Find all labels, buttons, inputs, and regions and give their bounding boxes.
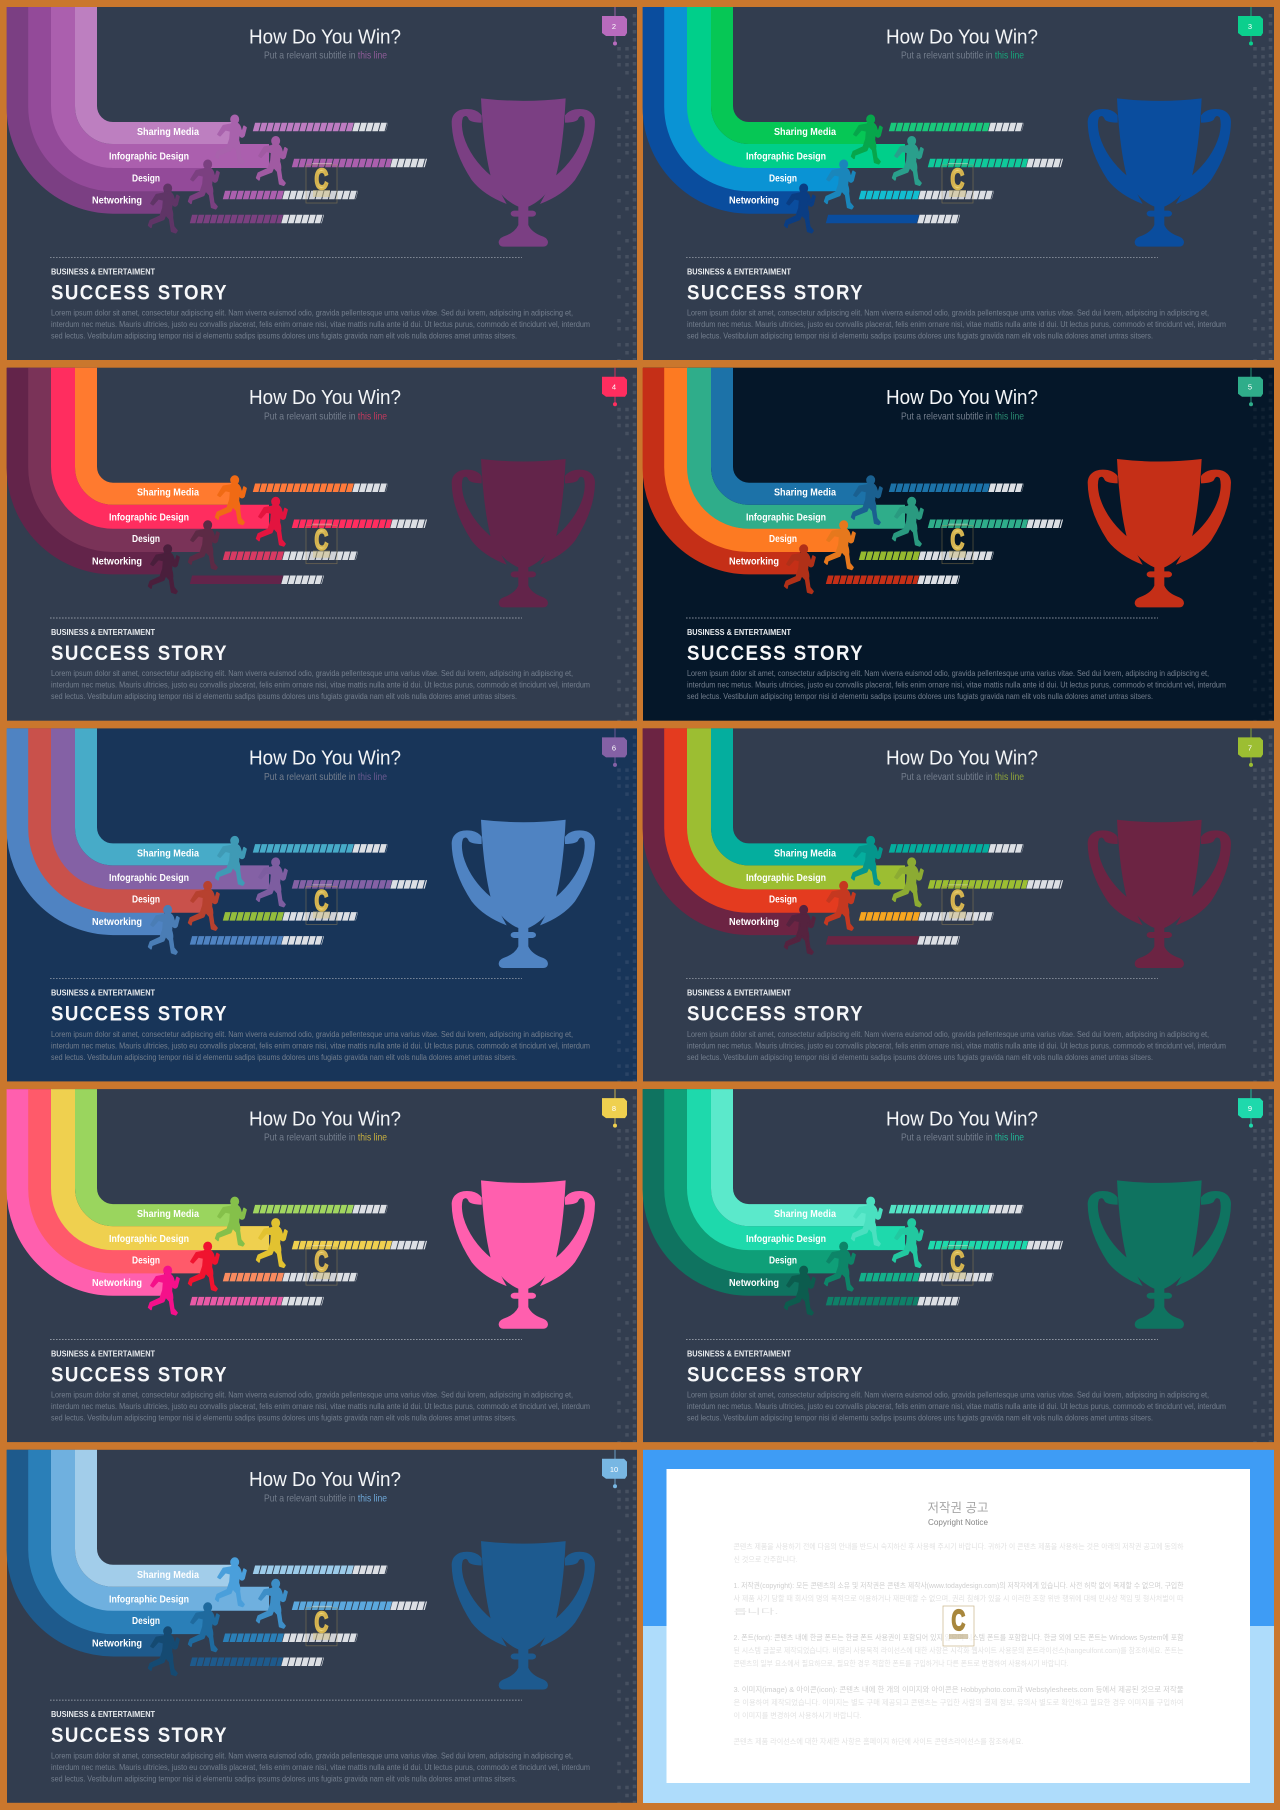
notice body text: 이 이미지를 변경하여 사용하시기 바랍니다. xyxy=(734,1710,862,1720)
notice subtitle: Copyright Notice xyxy=(928,1517,988,1527)
body text xyxy=(51,1751,590,1783)
progress bars xyxy=(827,127,1062,219)
body text: Lorem ipsum dolor sit amet, consectetur adipiscing elit. Nam viverra euismod odio, gravida pellentesque urna varius vitae. Sed dui lorem, adipiscing in adipiscing et, xyxy=(51,1030,573,1039)
band labels: Sharing Media xyxy=(774,1209,836,1220)
body text: sed lectus. Vestibulum adipiscing tempor nisi id elementu sadips ipsums dolores uns fugiats gravida nam elit vols nulla dolores amet untras sitsers. xyxy=(51,332,517,340)
band labels: Networking xyxy=(92,556,142,567)
panel: purple slide 2 xyxy=(7,7,637,360)
band labels: Sharing Media xyxy=(774,488,836,499)
notice body text xyxy=(734,1541,1184,1746)
kicker: BUSINESS & ENTERTAIMENT xyxy=(687,628,791,637)
heading: SUCCESS STORY xyxy=(687,642,864,665)
band labels: Networking xyxy=(92,917,142,928)
runner silhouettes xyxy=(149,115,287,233)
subtitle: Put a relevant subtitle in this line xyxy=(901,1132,1024,1144)
title: How Do You Win? xyxy=(249,748,401,770)
trophy xyxy=(1088,98,1231,247)
band labels: Networking xyxy=(92,1278,142,1289)
progress bars xyxy=(827,488,1062,580)
page number tab xyxy=(602,1089,627,1128)
body text: sed lectus. Vestibulum adipiscing tempor nisi id elementu sadips ipsums dolores uns fugiats gravida nam elit vols nulla dolores amet untras sitsers. xyxy=(51,692,517,701)
kicker: BUSINESS & ENTERTAIMENT xyxy=(687,1349,791,1358)
page number tab xyxy=(602,7,627,46)
body text: Lorem ipsum dolor sit amet, consectetur adipiscing elit. Nam viverra euismod odio, gravida pellentesque urna varius vitae. Sed dui lorem, adipiscing in adipiscing et, xyxy=(51,1391,573,1400)
white notice card xyxy=(666,1469,1250,1783)
curved bands xyxy=(18,1089,269,1284)
notice body text: 1. 저작권(copyright): 모든 콘텐츠의 소유 및 저작권은 콘텐츠 제작사(www.todaydesign.com)의 저작자에게 있습니다. 사전 허락 없이 복제할 수 없으며, 구입한 xyxy=(734,1580,1184,1590)
progress bars xyxy=(191,488,426,580)
trophy xyxy=(452,1541,595,1689)
body text: interdum nec metus. Mauris ultricies, justo eu convallis placerat, felis enim ornare nisi, vitae mattis nulla ante id dui. Ut lectus purus, commodo et tincidunt vel, interdum xyxy=(51,320,590,329)
runner silhouettes xyxy=(785,837,923,954)
page number tab: 6 xyxy=(612,743,616,752)
progress bars xyxy=(191,1570,426,1662)
band labels: Networking xyxy=(92,196,142,207)
page number tab: 3 xyxy=(1248,22,1252,31)
band labels: Design xyxy=(132,895,160,906)
kicker: BUSINESS & ENTERTAIMENT xyxy=(687,267,791,276)
body text xyxy=(687,669,1226,701)
trophy xyxy=(452,1180,595,1329)
band labels: Networking xyxy=(729,917,779,928)
runner silhouettes xyxy=(785,115,923,233)
band labels: Sharing Media xyxy=(774,127,836,138)
band labels: Design xyxy=(132,534,160,545)
body text xyxy=(687,308,1226,340)
side dot pattern xyxy=(619,1457,634,1803)
heading: SUCCESS STORY xyxy=(687,281,864,304)
trophy xyxy=(1088,459,1231,607)
runner silhouettes xyxy=(149,837,287,954)
side dot pattern xyxy=(619,14,634,360)
heading: SUCCESS STORY xyxy=(687,1363,864,1386)
notice body text: 릅니다. xyxy=(734,1607,778,1616)
heading: SUCCESS STORY xyxy=(51,1724,228,1747)
curved bands xyxy=(654,368,905,563)
panel: blue slide 10 xyxy=(7,1450,637,1803)
heading: SUCCESS STORY xyxy=(51,642,228,665)
notice body text: 사 제품 사기 당할 때 회사의 명의 목적으로 이용하거나 재판매할 수 없으며, 권리 침해가 있을 시 이러한 조항 위반 행위에 대해 민사상 책임 및 형사처벌이 따 xyxy=(734,1593,1184,1603)
page number tab xyxy=(1238,7,1263,46)
title: How Do You Win? xyxy=(886,26,1038,48)
kicker: BUSINESS & ENTERTAIMENT xyxy=(51,1710,155,1719)
band labels: Networking xyxy=(729,556,779,567)
page number tab: 10 xyxy=(610,1465,618,1474)
band labels: Design xyxy=(769,173,797,184)
side dot pattern xyxy=(1255,375,1270,721)
body text: interdum nec metus. Mauris ultricies, justo eu convallis placerat, felis enim ornare nisi, vitae mattis nulla ante id dui. Ut lectus purus, commodo et tincidunt vel, interdum xyxy=(51,1041,590,1050)
side dot pattern xyxy=(1255,14,1270,360)
band labels: Infographic Design xyxy=(109,1234,189,1245)
page number tab: 9 xyxy=(1248,1104,1252,1113)
watermark logo xyxy=(942,524,973,564)
body text xyxy=(687,1391,1226,1423)
notice body text: 콘텐츠 제품 라이선스에 대한 자세한 사항은 홈페이지 하단에 사이트 콘텐츠라이선스를 참조하세요. xyxy=(734,1736,1024,1746)
kicker: BUSINESS & ENTERTAIMENT xyxy=(687,989,791,998)
page number tab xyxy=(602,1450,627,1488)
curved bands xyxy=(654,1089,905,1284)
subtitle: Put a relevant subtitle in this line xyxy=(264,410,387,422)
band labels: Sharing Media xyxy=(137,127,199,138)
panel: blue-green slide 3 xyxy=(643,7,1274,360)
band labels: Networking xyxy=(92,1639,142,1650)
runner silhouettes xyxy=(785,1197,923,1315)
watermark logo xyxy=(306,885,337,924)
band labels: Networking xyxy=(729,1278,779,1289)
body text: sed lectus. Vestibulum adipiscing tempor nisi id elementu sadips ipsums dolores uns fugiats gravida nam elit vols nulla dolores amet untras sitsers. xyxy=(51,1053,517,1062)
curved bands xyxy=(18,1450,269,1645)
side dot pattern xyxy=(619,1096,634,1442)
notice title: 저작권 공고 xyxy=(928,1501,988,1515)
runner silhouettes xyxy=(149,1197,287,1315)
band labels: Sharing Media xyxy=(137,488,199,499)
body text: interdum nec metus. Mauris ultricies, justo eu convallis placerat, felis enim ornare nisi, vitae mattis nulla ante id dui. Ut lectus purus, commodo et tincidunt vel, interdum xyxy=(51,681,590,690)
curved bands xyxy=(18,368,269,563)
band labels: Infographic Design xyxy=(109,1595,189,1606)
subtitle: Put a relevant subtitle in this line xyxy=(901,410,1024,422)
body text xyxy=(51,1030,590,1062)
title: How Do You Win? xyxy=(886,748,1038,770)
subtitle: Put a relevant subtitle in this line xyxy=(901,50,1024,62)
progress bars xyxy=(191,127,426,219)
band labels: Design xyxy=(769,895,797,906)
body text: sed lectus. Vestibulum adipiscing tempor nisi id elementu sadips ipsums dolores uns fugiats gravida nam elit vols nulla dolores amet untras sitsers. xyxy=(687,1053,1153,1062)
body text xyxy=(51,669,590,701)
band labels xyxy=(92,1570,199,1650)
band labels: Sharing Media xyxy=(137,848,199,859)
body text: Lorem ipsum dolor sit amet, consectetur adipiscing elit. Nam viverra euismod odio, gravida pellentesque urna varius vitae. Sed dui lorem, adipiscing in adipiscing et, xyxy=(51,308,573,318)
body text: interdum nec metus. Mauris ultricies, justo eu convallis placerat, felis enim ornare nisi, vitae mattis nulla ante id dui. Ut lectus purus, commodo et tincidunt vel, interdum xyxy=(687,320,1226,329)
band labels xyxy=(729,1209,836,1289)
watermark logo xyxy=(942,1246,973,1285)
curved bands xyxy=(18,728,269,923)
body text: sed lectus. Vestibulum adipiscing tempor nisi id elementu sadips ipsums dolores uns fugiats gravida nam elit vols nulla dolores amet untras sitsers. xyxy=(687,1414,1153,1423)
band labels xyxy=(729,488,836,567)
band labels: Infographic Design xyxy=(746,152,826,163)
page number tab xyxy=(602,368,627,406)
page number tab: 4 xyxy=(612,383,616,392)
title: How Do You Win? xyxy=(249,26,401,48)
body text xyxy=(687,1030,1226,1062)
side dot pattern xyxy=(619,375,634,721)
band labels xyxy=(729,127,836,207)
band labels: Design xyxy=(769,534,797,545)
trophy xyxy=(1088,1180,1231,1329)
watermark logo: C xyxy=(952,1605,965,1637)
panel: pink-yellow slide 8 xyxy=(7,1089,637,1442)
trophy xyxy=(1088,820,1231,968)
band labels: Infographic Design xyxy=(109,152,189,163)
body text: Lorem ipsum dolor sit amet, consectetur adipiscing elit. Nam viverra euismod odio, gravida pellentesque urna varius vitae. Sed dui lorem, adipiscing in adipiscing et, xyxy=(687,308,1209,318)
trophy xyxy=(452,98,595,247)
watermark logo xyxy=(306,1246,337,1285)
watermark logo xyxy=(942,164,973,203)
body text: sed lectus. Vestibulum adipiscing tempor nisi id elementu sadips ipsums dolores uns fugiats gravida nam elit vols nulla dolores amet untras sitsers. xyxy=(51,1414,517,1423)
watermark logo xyxy=(306,524,337,564)
panel: teal-green-red slide 7 xyxy=(643,728,1274,1081)
subtitle: Put a relevant subtitle in this line xyxy=(264,771,387,783)
page number tab: 7 xyxy=(1248,743,1252,752)
trophy xyxy=(452,459,595,607)
band labels: Infographic Design xyxy=(746,512,826,523)
body text: Lorem ipsum dolor sit amet, consectetur adipiscing elit. Nam viverra euismod odio, gravida pellentesque urna varius vitae. Sed dui lorem, adipiscing in adipiscing et, xyxy=(687,1030,1209,1039)
body text: interdum nec metus. Mauris ultricies, justo eu convallis placerat, felis enim ornare nisi, vitae mattis nulla ante id dui. Ut lectus purus, commodo et tincidunt vel, interdum xyxy=(687,1041,1226,1050)
body text xyxy=(51,308,590,340)
side dot pattern xyxy=(1255,1096,1270,1442)
notice body text: 콘텐츠 제품을 사용하기 전에 다음의 안내를 반드시 숙지하신 후 사용해 주시기 바랍니다. 귀하가 이 콘텐츠 제품을 사용하는 것은 아래의 저작권 공고에 동의하 xyxy=(734,1541,1184,1551)
band labels: Design xyxy=(769,1255,797,1266)
curved bands xyxy=(18,7,269,202)
band labels: Infographic Design xyxy=(746,1234,826,1245)
band labels xyxy=(729,848,836,928)
kicker: BUSINESS & ENTERTAIMENT xyxy=(51,1349,155,1358)
panel: mint green slide 9 xyxy=(643,1089,1274,1442)
page number tab xyxy=(1238,1089,1263,1128)
band labels: Design xyxy=(132,1255,160,1266)
kicker: BUSINESS & ENTERTAIMENT xyxy=(51,989,155,998)
page number tab xyxy=(1238,728,1263,767)
band labels: Infographic Design xyxy=(109,873,189,884)
kicker: BUSINESS & ENTERTAIMENT xyxy=(51,628,155,637)
progress bars xyxy=(191,1209,426,1301)
band labels: Sharing Media xyxy=(137,1570,199,1581)
body text: Lorem ipsum dolor sit amet, consectetur adipiscing elit. Nam viverra euismod odio, gravida pellentesque urna varius vitae. Sed dui lorem, adipiscing in adipiscing et, xyxy=(51,1751,573,1760)
watermark logo xyxy=(943,1605,974,1646)
subtitle: Put a relevant subtitle in this line xyxy=(264,1132,387,1144)
band labels: Design xyxy=(132,173,160,184)
notice body text: 콘텐츠의 일부 요소에서 필요하므로, 필요한 경우 적합한 폰트를 구입하거나 다른 폰트로 변경하여 사용하시기 바랍니다. xyxy=(734,1658,1068,1668)
panel: navy multicolour slide 6 xyxy=(7,728,637,1081)
band labels: Design xyxy=(132,1616,160,1627)
body text: interdum nec metus. Mauris ultricies, justo eu convallis placerat, felis enim ornare nisi, vitae mattis nulla ante id dui. Ut lectus purus, commodo et tincidunt vel, interdum xyxy=(687,1402,1226,1411)
page number tab: 5 xyxy=(1248,383,1252,392)
notice body text: 은 이용하여 제작되었습니다. 이미지는 별도 구매 제공되고 콘텐츠는 구입한 사람의 결제 정보, 유의사 별도로 확인하고 필요한 경우 이미지를 구입하여 xyxy=(734,1697,1184,1707)
band labels xyxy=(92,848,199,928)
body text: Lorem ipsum dolor sit amet, consectetur adipiscing elit. Nam viverra euismod odio, gravida pellentesque urna varius vitae. Sed dui lorem, adipiscing in adipiscing et, xyxy=(51,669,573,678)
watermark logo xyxy=(942,885,973,924)
heading: SUCCESS STORY xyxy=(51,1363,228,1386)
heading: SUCCESS STORY xyxy=(687,1003,864,1026)
body text: sed lectus. Vestibulum adipiscing tempor nisi id elementu sadips ipsums dolores uns fugiats gravida nam elit vols nulla dolores amet untras sitsers. xyxy=(687,332,1153,340)
band labels: Infographic Design xyxy=(109,512,189,523)
body text: interdum nec metus. Mauris ultricies, justo eu convallis placerat, felis enim ornare nisi, vitae mattis nulla ante id dui. Ut lectus purus, commodo et tincidunt vel, interdum xyxy=(51,1763,590,1772)
band labels: Infographic Design xyxy=(746,873,826,884)
title: How Do You Win? xyxy=(249,1108,401,1130)
watermark logo xyxy=(306,1606,337,1646)
body text: sed lectus. Vestibulum adipiscing tempor nisi id elementu sadips ipsums dolores uns fugiats gravida nam elit vols nulla dolores amet untras sitsers. xyxy=(51,1774,517,1783)
panel: red-orange slide 4 xyxy=(7,368,637,721)
kicker: BUSINESS & ENTERTAIMENT xyxy=(51,267,155,276)
title: How Do You Win? xyxy=(249,1469,401,1491)
body text: interdum nec metus. Mauris ultricies, justo eu convallis placerat, felis enim ornare nisi, vitae mattis nulla ante id dui. Ut lectus purus, commodo et tincidunt vel, interdum xyxy=(51,1402,590,1411)
runner silhouettes xyxy=(149,476,287,593)
progress bars xyxy=(827,848,1062,940)
curved bands xyxy=(654,728,905,923)
body text: Lorem ipsum dolor sit amet, consectetur adipiscing elit. Nam viverra euismod odio, gravida pellentesque urna varius vitae. Sed dui lorem, adipiscing in adipiscing et, xyxy=(687,1391,1209,1400)
page number tab xyxy=(1238,368,1263,406)
subtitle: Put a relevant subtitle in this line xyxy=(901,771,1024,783)
band labels: Sharing Media xyxy=(774,848,836,859)
progress bars xyxy=(827,1209,1062,1301)
side dot pattern xyxy=(1255,735,1270,1081)
runner silhouettes xyxy=(149,1558,287,1675)
watermark logo xyxy=(306,164,337,203)
trophy xyxy=(452,820,595,968)
panel: copyright notice xyxy=(643,1450,1274,1803)
subtitle: Put a relevant subtitle in this line xyxy=(264,1492,387,1504)
body text: Lorem ipsum dolor sit amet, consectetur adipiscing elit. Nam viverra euismod odio, gravida pellentesque urna varius vitae. Sed dui lorem, adipiscing in adipiscing et, xyxy=(687,669,1209,678)
band labels: Sharing Media xyxy=(137,1209,199,1220)
body text xyxy=(51,1391,590,1423)
notice body text: 신 것으로 간주합니다. xyxy=(734,1554,798,1564)
runner silhouettes xyxy=(785,476,923,593)
subtitle: Put a relevant subtitle in this line xyxy=(264,50,387,62)
notice body text: 2. 폰트(font): 콘텐츠 내에 한글 폰트는 한글 폰트 사용권이 포함되어 있지 않으며 시스템 폰트를 포함합니다. 한글 외에 모든 폰트는 Windows System에 포함 xyxy=(734,1632,1184,1642)
curved bands xyxy=(654,7,905,202)
heading: SUCCESS STORY xyxy=(51,281,228,304)
title: How Do You Win? xyxy=(886,1108,1038,1130)
progress bars xyxy=(191,848,426,940)
body text: interdum nec metus. Mauris ultricies, justo eu convallis placerat, felis enim ornare nisi, vitae mattis nulla ante id dui. Ut lectus purus, commodo et tincidunt vel, interdum xyxy=(687,681,1226,690)
band labels xyxy=(92,127,199,207)
title: How Do You Win? xyxy=(886,387,1038,409)
title: How Do You Win? xyxy=(249,387,401,409)
notice body text: 3. 이미지(image) & 아이콘(icon): 콘텐츠 내에 한 개의 이미지와 아이콘은 Hobbyphoto.com과 Webstylesheets.com 등에서 제공된 것으로 저작물 xyxy=(734,1684,1184,1694)
heading: SUCCESS STORY xyxy=(51,1003,228,1026)
side dot pattern xyxy=(619,735,634,1081)
band labels: Networking xyxy=(729,196,779,207)
page number tab xyxy=(602,728,627,767)
band labels xyxy=(92,488,199,567)
notice body text: 된 시스템 글꼴로 제작되었습니다. 비영리 사용목적 라이선스에 대한 사항은 시각화 웹사이트 사용문의 폰트라이선스(hangeulfont.com)를 참조하세요. 폰트는 xyxy=(734,1645,1184,1655)
body text: sed lectus. Vestibulum adipiscing tempor nisi id elementu sadips ipsums dolores uns fugiats gravida nam elit vols nulla dolores amet untras sitsers. xyxy=(687,692,1153,701)
page number tab: 2 xyxy=(612,22,616,31)
page number tab: 8 xyxy=(612,1104,616,1113)
panel: dark navy slide 5 xyxy=(643,368,1274,721)
band labels xyxy=(92,1209,199,1289)
